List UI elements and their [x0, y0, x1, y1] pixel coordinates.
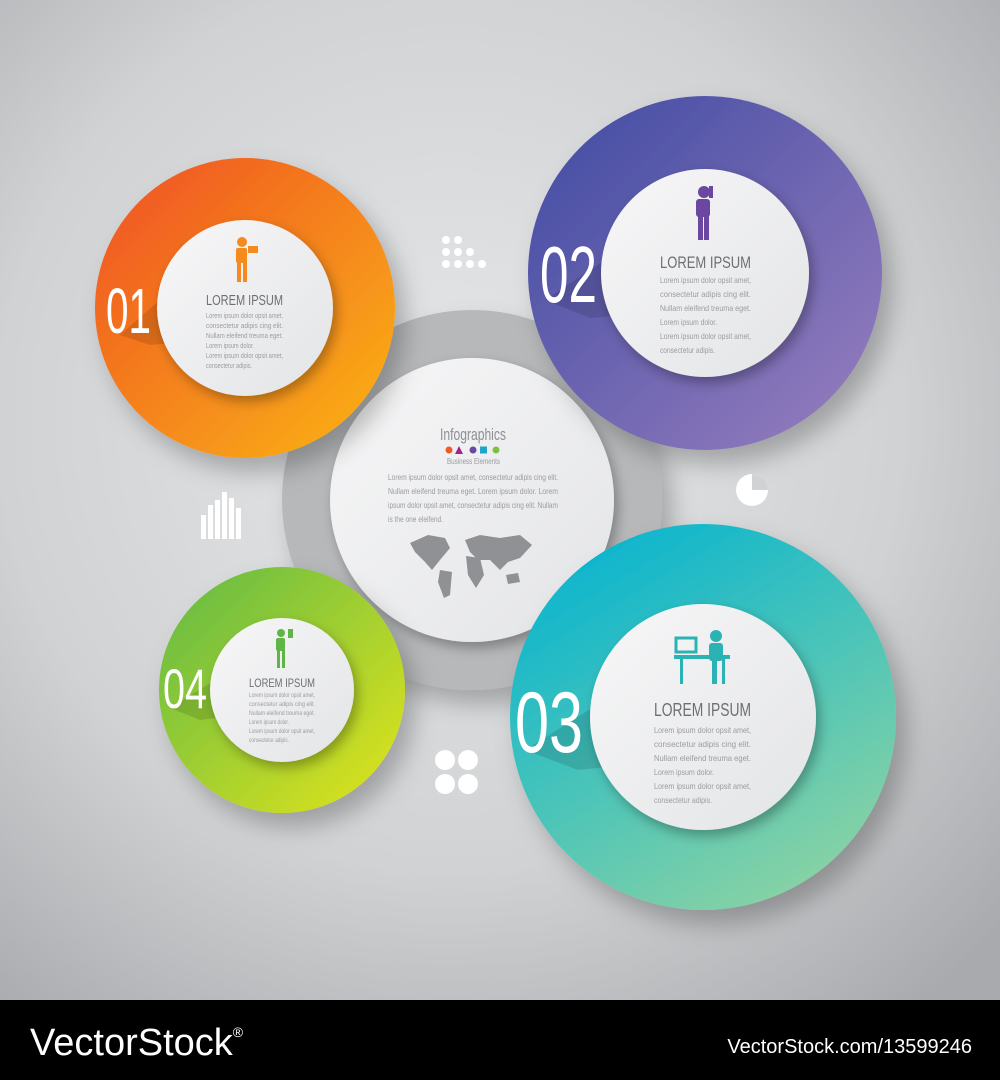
number 02: 02: [540, 230, 597, 319]
panel: 04 green: Lorem ipsum dolor opsit amet,: [249, 693, 315, 699]
panel: 01 orange: consectetur adipis cing elit.: [206, 323, 283, 330]
center body text: ipsum dolor opsit amet, consectetur adipis cing elit. Nullam: [388, 501, 558, 510]
panel: center ring: Business Elements: [447, 457, 500, 466]
icon: person green: [276, 629, 293, 668]
panel: 04 green: Lorem ipsum dolor opsit amet,: [249, 729, 315, 735]
number 04: 04: [163, 657, 207, 720]
icon: person at desk: [674, 630, 730, 684]
icon: four discs: [435, 750, 478, 794]
icon: shapes row: [446, 446, 500, 454]
panel: 02 purple: LOREM IPSUM: [660, 253, 751, 272]
panel: 03 teal: Lorem ipsum dolor opsit amet,: [654, 725, 751, 735]
number 01: 01: [106, 275, 151, 347]
center body text: is the one eleifend.: [388, 515, 443, 524]
panel: 03 teal: LOREM IPSUM: [654, 700, 751, 720]
footer bar: VectorStock.com/13599246: [727, 1036, 972, 1058]
panel: 04 green: Lorem ipsum dolor.: [249, 720, 289, 726]
number 03: 03: [515, 675, 583, 771]
center body text: Lorem ipsum dolor opsit amet, consectetur adipis cing elit.: [388, 473, 558, 482]
panel: 03 teal: Lorem ipsum dolor opsit amet,: [654, 781, 751, 791]
icon: world map: [410, 535, 532, 598]
footer bar: [0, 1000, 1000, 1080]
panel: 02 purple: consectetur adipis.: [660, 345, 715, 355]
footer bar: VectorStock: [30, 1022, 233, 1064]
panel: 02 purple: Nullam eleifend treuma eget.: [660, 303, 751, 313]
panel: 02 purple: consectetur adipis cing elit.: [660, 289, 751, 299]
panel: 03 teal: consectetur adipis.: [654, 795, 712, 805]
center body text: [388, 473, 558, 524]
panel: 04 green: Nullam eleifend treuma eget.: [249, 711, 315, 717]
panel: 04 green: consectetur adipis cing elit.: [249, 702, 315, 708]
panel: 02 purple: Lorem ipsum dolor.: [660, 317, 717, 327]
panel: 01 orange: Nullam eleifend treuma eget.: [206, 333, 283, 340]
panel: 01 orange: [95, 158, 395, 458]
panel: 02 purple: [528, 96, 882, 450]
icon: dot network: [442, 236, 486, 268]
panel: 03 teal: consectetur adipis cing elit.: [654, 739, 751, 749]
footer bar: ®: [233, 1024, 244, 1040]
panel: 04 green: consectetur adipis.: [249, 738, 289, 744]
panel: 01 orange: consectetur adipis.: [206, 363, 252, 370]
icon: pie chart: [736, 474, 768, 506]
icon: bar chart: [201, 492, 241, 539]
center body text: Nullam eleifend treuma eget. Lorem ipsum dolor. Lorem: [388, 487, 558, 496]
panel: 02 purple: Lorem ipsum dolor opsit amet,: [660, 275, 751, 285]
panel: 03 teal: Nullam eleifend treuma eget.: [654, 753, 751, 763]
panel: 02 purple: Lorem ipsum dolor opsit amet,: [660, 331, 751, 341]
panel: 01 orange: LOREM IPSUM: [206, 292, 283, 309]
icon: person purple: [696, 186, 713, 240]
panel: 01 orange: Lorem ipsum dolor opsit amet,: [206, 353, 283, 360]
icon: person orange: [236, 237, 258, 282]
panel: center ring: [282, 310, 662, 690]
panel: 01 orange: Lorem ipsum dolor.: [206, 343, 254, 350]
center title: Infographics: [440, 425, 506, 444]
panel: 01 orange: Lorem ipsum dolor opsit amet,: [206, 313, 283, 320]
panel: 03 teal: Lorem ipsum dolor.: [654, 767, 714, 777]
panel: 04 green: [159, 567, 405, 813]
panel: 03 teal: [510, 524, 896, 910]
panel: 04 green: LOREM IPSUM: [249, 676, 315, 690]
